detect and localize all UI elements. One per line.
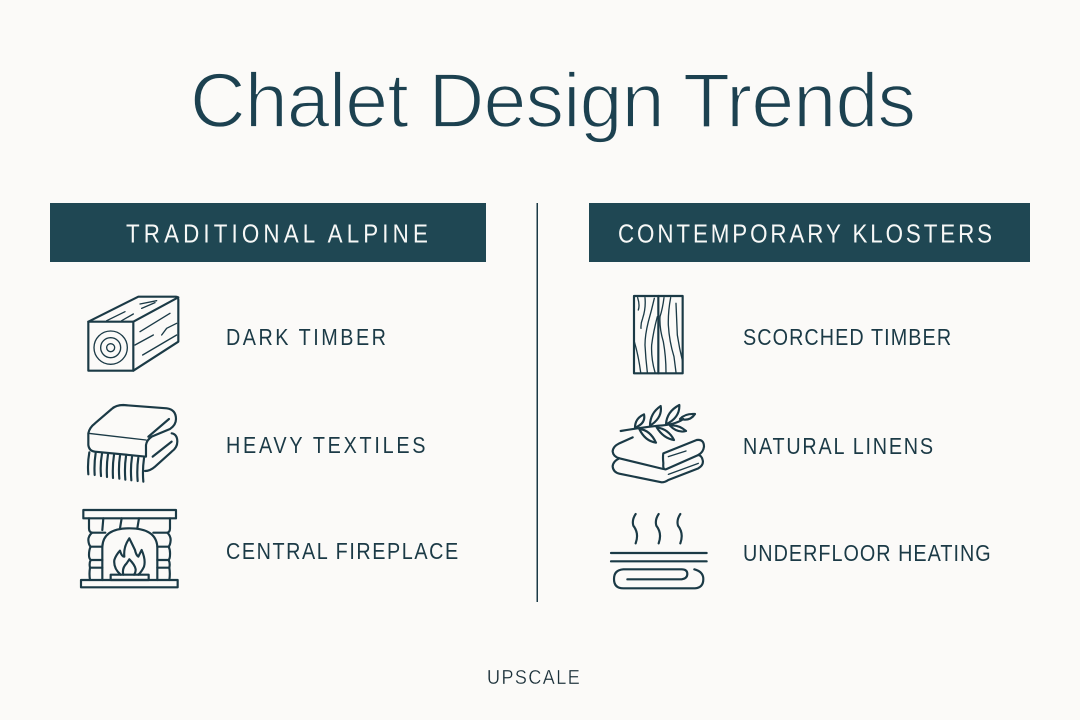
icon: timber log [88,297,178,371]
title: Chalet Design Trends [190,58,916,144]
panel header: contemporary klosters [589,203,1030,262]
panel header: traditional alpine: TRADITIONAL ALPINE [126,220,428,249]
icon: heavy textiles blanket [88,405,177,482]
brand logo: upscale: UPSCALE [487,667,580,689]
icon: central fireplace [81,510,178,587]
icon: scorched timber plank [634,296,683,373]
label: central fireplace: CENTRAL FIREPLACE [226,539,458,564]
label: natural linens: NATURAL LINENS [743,434,933,459]
icon: underfloor heating [611,514,707,588]
icon: natural linens with sprig [613,405,704,482]
panel header: traditional alpine [50,203,486,262]
panel header: contemporary klosters: CONTEMPORARY KLOSTERS [618,220,992,249]
label: dark timber: DARK TIMBER [226,325,386,350]
label: scorched timber: SCORCHED TIMBER [743,325,951,350]
label: heavy textiles: HEAVY TEXTILES [226,433,426,458]
label: underfloor heating: UNDERFLOOR HEATING [743,541,991,566]
